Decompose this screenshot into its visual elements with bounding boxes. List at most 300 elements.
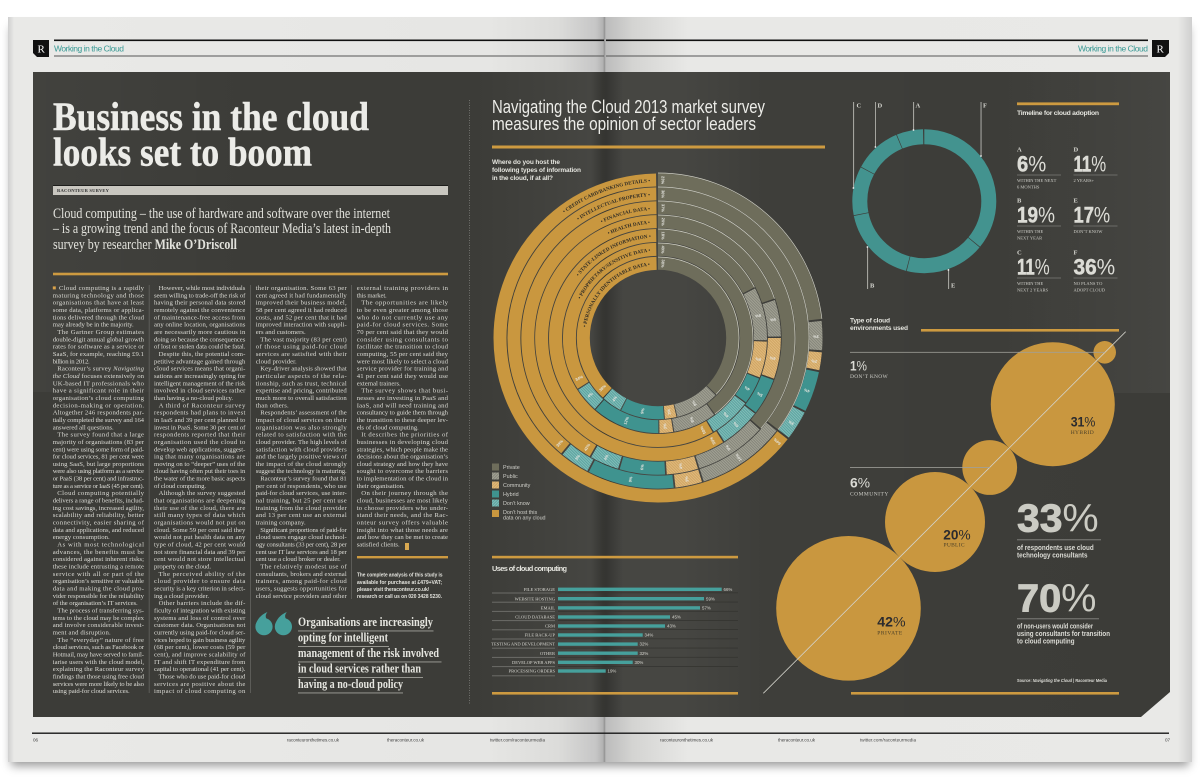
stat: 33 percent: technology consultants <box>1017 552 1088 559</box>
segment percentages: 5% <box>769 317 776 323</box>
article column 4: insight into what those needs are <box>357 527 448 534</box>
pull quote: opting for intelligent <box>298 630 389 644</box>
label: hybrid: HYBRID <box>1071 430 1094 436</box>
stat F: NO PLANS TO <box>1074 281 1103 286</box>
orange closing rule <box>851 692 1119 695</box>
article column 1: organisations that have at least <box>53 300 144 307</box>
article column 3: cloud users engage cloud technol- <box>256 534 347 541</box>
purchase note <box>357 572 442 600</box>
stat B: 19% <box>1017 203 1055 228</box>
stat B: B <box>1017 198 1022 204</box>
article column 1: iarise users with the cloud model, <box>53 659 144 666</box>
drop square bullet <box>53 286 56 289</box>
article column 3: cent use IT law services and 18 per <box>256 549 347 556</box>
article column 1: organisation’s cloud computing <box>53 395 145 402</box>
article column 3: particular aspects of the rela- <box>256 373 347 380</box>
stat: 33 percent <box>1017 498 1101 559</box>
article column 2: that organisations are deepening <box>154 498 246 505</box>
intro standfirst: – is a growing trend and the focus of Raconteur Media’s latest in-depth <box>52 220 391 237</box>
bar labels: OTHER <box>540 651 555 656</box>
chart legend: Don’t host this <box>503 510 537 516</box>
bar labels <box>491 587 556 674</box>
segment percentages: 9% <box>639 407 646 414</box>
ring: health data <box>535 215 781 461</box>
article column 4: external trainers. <box>357 380 401 387</box>
article column 1: data and making the cloud pro- <box>53 586 144 593</box>
label: don't know: DON’T KNOW <box>850 374 888 380</box>
article column 3: of those using paid-for cloud <box>256 344 347 351</box>
article column 2: organisation used the cloud to <box>154 439 246 446</box>
article column 1: energy consumption. <box>53 534 110 541</box>
article column 4: paid-for cloud services. Some <box>357 322 448 329</box>
intro standfirst: survey by researcher Mike O’Driscoll <box>53 236 237 253</box>
bar labels: CLOUD DATABASE <box>515 615 555 620</box>
chart legend <box>492 464 546 522</box>
right page header: R <box>1156 44 1164 56</box>
segment percentages: 4% <box>586 391 594 399</box>
article column 1: double-digit annual global growth <box>53 336 145 343</box>
bar values: 59% <box>706 596 715 601</box>
article column 1: the Cloud focuses extensively on <box>53 373 144 380</box>
circle: community <box>962 440 1017 495</box>
article column 4: 41 per cent said they would use <box>357 373 448 380</box>
bar labels: TESTING AND DEVELOPMENT <box>491 642 555 647</box>
donut callout lines: F <box>983 102 987 110</box>
segment percentages: 38% <box>660 259 666 268</box>
article column 1: vider responsible for the reliability <box>53 593 145 600</box>
segment percentages: 9% <box>627 476 633 483</box>
label: community: COMMUNITY <box>850 491 888 497</box>
article column 4: 70 per cent said that they would <box>357 329 449 336</box>
pull quote: in cloud services rather than <box>298 662 421 676</box>
bar values: 32% <box>640 642 648 647</box>
orange rule under heading <box>492 146 825 148</box>
article column 2: Despite this, the potential com- <box>159 351 245 358</box>
article column 2: cloud having often put their toes in <box>154 468 246 475</box>
article column 3: cloud provider. The high levels of <box>256 439 347 446</box>
main title: looks set to boom <box>53 130 312 174</box>
article column 1: maturing technology and those <box>53 292 144 299</box>
ring: financial data <box>521 201 795 475</box>
article column 4: decisions about the organisation’s <box>357 454 448 461</box>
dark panel <box>33 72 1170 717</box>
article column 2: are necessarily more cautious in <box>154 329 246 336</box>
article column 1: The survey found that a large <box>57 432 144 439</box>
segment percentages <box>555 176 819 483</box>
stat A: A <box>1017 146 1022 154</box>
article column 1: these include entrusting a remote <box>53 564 144 571</box>
article column 2: still many types of data which <box>154 512 246 519</box>
stat: 70 percent: using consultants for transition <box>1017 631 1110 638</box>
adoption donut chart <box>860 137 989 266</box>
segment percentages: 3% <box>574 453 581 461</box>
chart legend: Hybrid <box>503 492 519 498</box>
segment percentages: 3% <box>684 475 690 483</box>
curved ring labels: • INTELLECTUAL PROPERTY • <box>577 193 650 220</box>
main title <box>53 94 369 174</box>
bar labels: WEBSITE HOSTING <box>515 596 556 601</box>
article column 1: some data, platforms or applica- <box>53 307 144 314</box>
article column 1: Raconteur’s survey Navigating <box>57 366 144 373</box>
page footer: theraconteur.co.uk <box>387 738 425 742</box>
stat E: 17% <box>1074 203 1110 228</box>
circle: private <box>776 536 921 681</box>
article column 3: tionship, such as trust, technical <box>256 380 347 387</box>
timeline heading: Timeline for cloud adoption <box>1017 110 1099 117</box>
stat A: 6% <box>1017 152 1046 177</box>
stat B: WITHIN THE <box>1017 229 1044 234</box>
article column 2: petitive advantage gained through <box>154 358 246 365</box>
article column 1: advances, the benefits must be <box>53 549 144 556</box>
curved ring labels <box>563 179 651 327</box>
article column 4: businesses in developing cloud <box>357 439 449 446</box>
segment percentages: 64% <box>772 437 782 446</box>
article column 2: seem willing to trade-off the risk of <box>154 292 246 299</box>
bar labels: PROCESSING ORDERS <box>509 669 555 674</box>
stat F: F <box>1074 250 1078 256</box>
bar values: 32% <box>640 651 648 656</box>
cloud environments heading: Type of cloud <box>850 318 890 325</box>
purchase note: available for purchase at £479+VAT; <box>357 580 442 586</box>
article column 1: rates for software as a service or <box>53 344 145 351</box>
article column 2: respondents reported that their <box>154 432 246 439</box>
bar labels: CRM <box>545 624 555 629</box>
source line: Source: Navigating the Cloud | Raconteur Media <box>1017 678 1107 684</box>
cloud environments heading <box>850 318 1119 332</box>
article column 1: for cloud services, 81 per cent were <box>53 454 144 461</box>
pull quote <box>298 615 442 693</box>
article column 1: findings that those using free cloud <box>53 673 145 680</box>
article column 4: computing, 55 per cent said they <box>357 351 449 358</box>
article column 1: answered all questions. <box>53 424 114 431</box>
segment percentages: 3% <box>662 423 668 429</box>
article column 1: SaaS, for example, reaching £9.1 <box>53 351 144 358</box>
chart question: in the cloud, if at all? <box>492 175 553 182</box>
article column 1: connectivity, easier sharing of <box>53 520 145 527</box>
segment percentages: 39% <box>555 438 565 448</box>
label: hybrid: 31% <box>1071 414 1095 430</box>
article column 2: their use of the cloud, there are <box>154 505 245 512</box>
purchase note: The complete analysis of this study is <box>357 572 442 578</box>
bar values <box>608 587 732 674</box>
icon: quotation marks <box>255 612 292 635</box>
article column 4: external training providers in <box>357 285 449 292</box>
ring: state-linked information <box>549 229 767 447</box>
article column 4: to implementation of the cloud in <box>357 476 449 483</box>
article column 4: cloud, businesses are most likely <box>357 498 449 505</box>
stat D <box>1074 146 1118 183</box>
segment percentages: 9% <box>724 444 732 452</box>
article column 1: service with all or part of the <box>53 571 144 578</box>
article column 4: strategies, which people make the <box>357 446 448 453</box>
stat: 70 percent: 70% <box>1017 578 1096 621</box>
article column 2: of maintenance-free access from <box>154 314 246 321</box>
label: private: PRIVATE <box>877 630 903 636</box>
cloud environments heading: environments used <box>850 325 908 332</box>
article column 3: ogy consultants (33 per cent), 28 per <box>256 542 347 549</box>
chart legend: data on any cloud <box>503 516 546 522</box>
article column 2: customer data. Organisations not <box>154 622 245 629</box>
segment percentages: 6% <box>754 356 762 362</box>
main title: Business in the cloud <box>53 94 369 139</box>
segment percentages: 59% <box>708 436 717 446</box>
segment percentages: 6% <box>769 355 776 361</box>
article column 3: and 13 per cent use an external <box>256 512 347 519</box>
article column 3: and the largely positive views of <box>256 454 347 461</box>
segment percentages: 8% <box>688 416 695 424</box>
article column 2: the water of the more basic aspects <box>154 476 246 483</box>
article column 3: suggest the technology is maturing. <box>256 468 347 475</box>
article column 3: impact of cloud services on their <box>256 417 347 424</box>
bar values: 45% <box>672 615 681 620</box>
page footer: twitter.com/raconteurmedia <box>490 738 545 742</box>
segment percentages: 42% <box>583 442 592 452</box>
article column 2: respondents had plans to invest <box>154 410 245 417</box>
segment percentages: 12% <box>622 416 630 425</box>
article column 1: Altogether 246 respondents par- <box>53 410 144 417</box>
stat A: WITHIN THE NEXT <box>1017 178 1057 183</box>
stat: 70 percent: to cloud computing <box>1017 638 1074 646</box>
article column 2: IT and shift IT expenditure from <box>154 659 246 666</box>
stat: 70 percent: of non-users would consider <box>1017 624 1093 631</box>
article column 4: stand their needs, and the Rac- <box>357 512 448 519</box>
article column 4: consider using consultants to <box>357 336 449 343</box>
stat C: C <box>1017 250 1022 256</box>
article column 3: training company. <box>256 520 306 527</box>
bar labels: FILE BACK-UP <box>525 633 555 638</box>
section tag bar: RACONTEUR SURVEY <box>57 188 110 193</box>
survey heading: Navigating the Cloud 2013 market survey <box>492 97 765 117</box>
left page header <box>33 40 604 57</box>
article column 4: consultancy to guide them through <box>357 410 449 417</box>
article column 2: capital to operational (41 per cent). <box>154 666 246 673</box>
article column 2: involved in cloud services rather <box>154 388 246 395</box>
page footer: raconteuronthetimes.co.uk <box>660 738 714 742</box>
chart question: Where do you host the <box>492 159 560 166</box>
article column 2: of lost or stolen data could be fatal. <box>154 344 246 351</box>
purchase note: research or call us on 020 3428 5230. <box>357 594 442 600</box>
article column 4: The survey shows that busi- <box>361 388 448 395</box>
article column 4: the transition to these deeper lev- <box>357 417 448 424</box>
stat E: DON’T KNOW <box>1074 229 1103 234</box>
article column 3: Respondents’ assessment of the <box>260 410 347 417</box>
orange rule <box>53 273 448 275</box>
segment percentages: 6% <box>732 420 740 428</box>
segment percentages: 4% <box>611 395 619 403</box>
segment percentages: 34% <box>574 374 584 382</box>
intro standfirst <box>52 205 391 253</box>
chart legend: Private <box>503 465 520 471</box>
article column 2: intelligent management of the risk <box>154 380 246 387</box>
article column 2: cloud. Some 59 per cent said they <box>154 527 246 534</box>
segment percentages: 4% <box>603 453 610 461</box>
orange rule under article <box>357 556 448 558</box>
article column 3: paid-for cloud services, use inter- <box>256 490 347 497</box>
article column 3: consultants, brokers and external <box>256 571 347 578</box>
article column 1: ing cost savings, increased agility, <box>53 505 144 512</box>
bars <box>558 588 722 673</box>
bar labels: DEVELOP WEB APPS <box>512 660 555 665</box>
stat: 33 percent: 33% <box>1017 498 1099 541</box>
curved ring labels: • FINANCIAL DATA • <box>601 207 650 222</box>
purchase note: please visit theraconteur.co.uk/ <box>357 587 429 593</box>
curved ring labels: • PERSONALLY IDENTIFIABLE DATA • <box>583 263 650 327</box>
article column 2: cloud services means that organi- <box>154 366 245 373</box>
article column 1: and involve considerable invest- <box>53 622 144 629</box>
stat B: NEXT YEAR <box>1017 236 1042 240</box>
article column 3: services are satisfied with their <box>256 351 347 358</box>
bar values: 43% <box>667 624 676 629</box>
article column 4: The opportunities are likely <box>361 300 449 307</box>
article column 4: cloud strategy and how they have <box>357 461 448 468</box>
stat C <box>1017 250 1061 292</box>
curved ring labels: • CREDIT CARD/BANKING DETAILS • <box>563 179 650 212</box>
donut callout lines: B <box>870 282 875 290</box>
label: private: 42% <box>877 614 906 630</box>
article column 2: impact of cloud computing on <box>154 688 246 695</box>
article column 1: organisation’s sensitive or valuable <box>53 578 144 585</box>
chart question <box>492 159 581 182</box>
article column 1: UK-based IT professionals who <box>53 380 145 387</box>
stat C: 11% <box>1017 255 1050 280</box>
article column 4: nesses are investing in PaaS and <box>357 395 449 402</box>
segment percentages: 3% <box>813 334 819 339</box>
bar values: 30% <box>634 660 643 665</box>
segment percentages: 4% <box>743 385 751 392</box>
article column 4: satisfied clients. <box>357 542 400 549</box>
ring: personally identifiable data <box>577 257 739 419</box>
bar values: 66% <box>724 587 732 592</box>
article column 2: Although the survey suggested <box>159 490 246 497</box>
article column 4: onteur survey offers valuable <box>357 520 448 527</box>
ring: intellectual property <box>507 187 809 489</box>
article column 3: The vast majority (83 per cent) <box>260 336 347 343</box>
page footer: theraconteur.co.uk <box>778 738 816 742</box>
article column 3: cent agreed it had fundamentally <box>256 292 347 299</box>
page footer <box>32 732 1171 742</box>
article column 3: training from the cloud provider <box>256 505 347 512</box>
article column 2: security is a key criterion in select- <box>154 586 245 593</box>
segment percentages: 58% <box>699 425 707 435</box>
stat F: ADOPT CLOUD <box>1074 288 1106 292</box>
label: public: 20% <box>943 526 971 542</box>
article column 4: facilitate the transition to cloud <box>357 344 449 351</box>
article column 2: (68 per cent), lower costs (59 per <box>154 644 246 651</box>
article column 1: may already be in the majority. <box>53 322 134 329</box>
segment percentages: 38% <box>598 383 607 392</box>
label: community <box>850 475 888 497</box>
article column 3: users, suggests opportunities for <box>256 586 347 593</box>
bar labels: FILE STORAGE <box>524 587 555 592</box>
article column 2: The perceived ability of the <box>159 571 245 578</box>
segment percentages: 36% <box>660 190 666 199</box>
column separators <box>149 285 352 693</box>
segment percentages: 18% <box>660 232 666 240</box>
article column 1: cloud services, such as Facebook or <box>53 644 145 651</box>
stat A: 6 MONTHS <box>1017 184 1040 190</box>
article column 1: services were more likely to be also <box>53 681 145 688</box>
article column 2: doing so because the consequences <box>154 336 246 343</box>
article column 4: On their journey through the <box>361 490 448 497</box>
circle: don't know <box>1093 341 1116 364</box>
segment percentages: 37% <box>660 204 666 212</box>
article column 1: were also using platform as a service <box>53 468 144 475</box>
article column 2: ficulty of integration with existing <box>154 608 246 615</box>
segment percentages: 3% <box>787 419 795 427</box>
stat D: 11% <box>1074 152 1106 177</box>
donut callout lines: C <box>856 102 862 110</box>
article column 2: services are positive about the <box>154 681 245 688</box>
article column 2: A third of Raconteur survey <box>159 402 246 409</box>
article column 2: of cloud computing. <box>154 483 206 490</box>
donut callout lines <box>852 102 987 290</box>
article column 1: billion in 2012. <box>53 358 90 365</box>
article column 2: currently using paid-for cloud ser- <box>154 629 245 636</box>
right page header <box>606 40 1169 57</box>
left page header: R <box>38 44 46 56</box>
article column 1: Hotmail, may have served to famil- <box>53 651 144 658</box>
article column 2: cloud provider to ensure data <box>154 578 245 585</box>
ring: credit card/banking details <box>493 173 823 503</box>
dotted page divider <box>468 100 470 704</box>
stat F <box>1074 250 1118 292</box>
page footer: twitter.com/raconteurmedia <box>860 738 916 742</box>
article column 3: Key-driver analysis showed that <box>260 366 347 373</box>
article column 2: ing that many organisations are <box>154 454 245 461</box>
article column 2: Other barriers include the dif- <box>159 600 245 607</box>
article column 2: systems and loss of control over <box>154 615 246 622</box>
stat C: WITHIN THE <box>1017 281 1044 286</box>
bar values: 19% <box>608 669 616 674</box>
label: hybrid <box>1071 414 1095 436</box>
article column 4: sought to overcome the barriers <box>357 468 448 475</box>
label: community: 6% <box>850 475 870 491</box>
article column 3: cloud service providers and other <box>256 593 347 600</box>
uses of cloud computing bar chart <box>491 556 738 695</box>
page footer: 06 <box>33 738 39 742</box>
ring: proprietary/sensitive data <box>563 243 753 433</box>
page footer: raconteuronthetimes.co.uk <box>287 738 340 742</box>
segment percentages: 8% <box>754 313 761 319</box>
donut callout lines: D <box>878 102 882 110</box>
article column 1: ment and disruption. <box>53 629 111 636</box>
article column 3: the impact of the cloud strongly <box>256 461 347 468</box>
article column 3: nal training, but 25 per cent use <box>256 498 347 505</box>
article column 3: organisation was also strongly <box>256 424 347 431</box>
article column 4: who do not currently use any <box>357 314 449 321</box>
article column 4: and how they can be met to create <box>357 534 448 541</box>
bar values: 57% <box>702 606 711 610</box>
chart legend: Community <box>503 483 531 489</box>
pull quote: Organisations are increasingly <box>298 615 434 629</box>
article column 2: organisations would not put on <box>154 520 246 527</box>
article column 2: cent), and improve scalability of <box>154 651 246 658</box>
pull quote: having a no-cloud policy <box>298 677 404 691</box>
article column 2: develop web applications, suggest- <box>154 446 245 453</box>
article column 1: tially completed the survey and 164 <box>53 417 145 424</box>
article column 3: 58 per cent agreed it had reduced <box>256 307 347 314</box>
end mark <box>405 543 409 550</box>
curved ring labels: • STATE-LINKED INFORMATION • <box>577 234 651 276</box>
donut callout lines: A <box>916 102 920 110</box>
article column 2: having their personal data stored <box>154 300 246 307</box>
article column 1: As with most technological <box>57 542 144 549</box>
article column 4: service provider for training and <box>357 366 449 373</box>
timeline heading <box>1017 102 1119 117</box>
segment percentages: 6% <box>722 411 730 419</box>
article column 3: much more to overall satisfaction <box>256 395 347 402</box>
article column 2: any online location, organisations <box>154 322 246 329</box>
